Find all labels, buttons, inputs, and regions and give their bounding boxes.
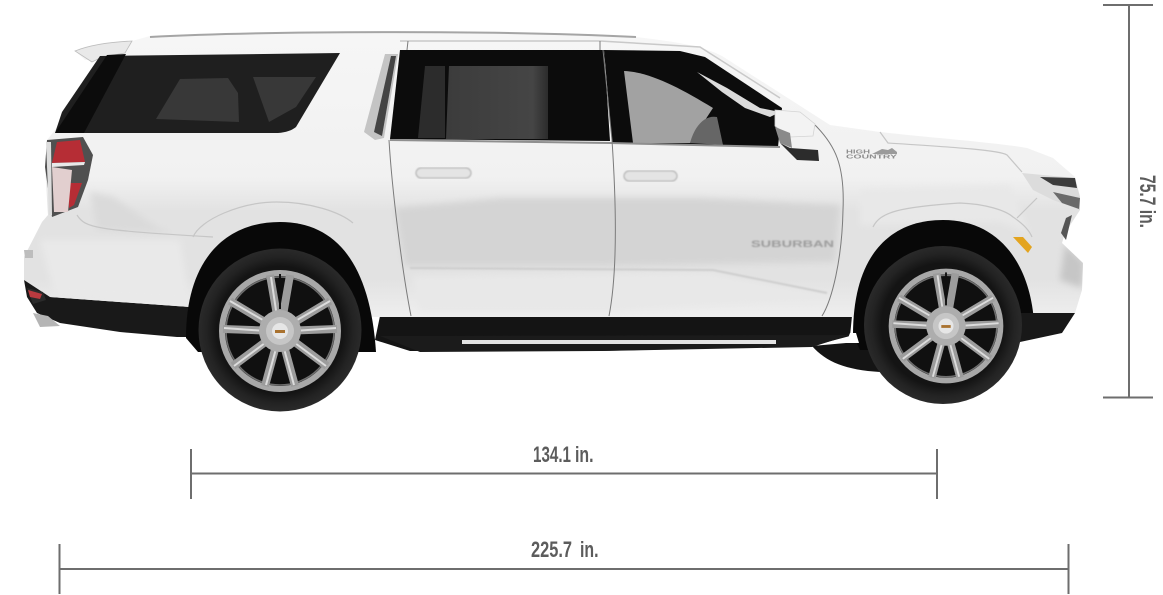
vehicle illustration: [24, 32, 1084, 412]
roof edge: [400, 41, 780, 98]
wheelbase value: 134.1: [533, 442, 571, 467]
front window: [604, 50, 782, 147]
spoiler: [75, 41, 132, 62]
front door handle: [624, 171, 677, 181]
rear wheel: [198, 248, 362, 412]
wheel-arch flares: [77, 132, 1037, 237]
headlamp: [1022, 173, 1080, 210]
overall height dimension: [1103, 5, 1160, 398]
overall length value: in.: [580, 537, 598, 562]
grille edge: [1061, 215, 1072, 240]
body shading: [58, 194, 1083, 304]
rear wheel well: [186, 222, 376, 352]
badge: model name: SUBURBAN: [751, 239, 834, 249]
front wheel well: [853, 220, 1034, 350]
rear reflector and exhaust: [24, 250, 60, 327]
badge: trim: COUNTRY: [846, 154, 898, 160]
overall height value: 75.7 in.: [1135, 175, 1160, 228]
rear bumper lower trim: [24, 280, 190, 337]
badge: trim: HIGH: [846, 150, 871, 156]
running board: [380, 335, 850, 352]
overall length dimension: [59, 537, 1069, 594]
door seams: [389, 41, 843, 316]
mirror: [775, 110, 819, 161]
body shell: [24, 32, 1083, 322]
door crease: [410, 268, 827, 293]
belt line: [390, 140, 780, 147]
tail lamp: [45, 137, 93, 217]
amber marker: [1013, 237, 1032, 253]
middle window: [390, 50, 610, 141]
wheelbase value: in.: [575, 442, 594, 467]
vehicle under-shadow and lower trim: [375, 316, 880, 372]
front lower trim: [1015, 313, 1075, 342]
roof rail: [150, 32, 636, 37]
rear door handle: [416, 168, 471, 178]
badge: trim: [846, 148, 898, 160]
wheelbase dimension: [191, 442, 937, 499]
front wheel: [864, 246, 1022, 404]
underbody gap: [846, 333, 859, 343]
c-pillar chrome trim: [364, 54, 398, 140]
overall length value: 225.7: [531, 537, 572, 562]
rear quarter window: [55, 53, 340, 133]
